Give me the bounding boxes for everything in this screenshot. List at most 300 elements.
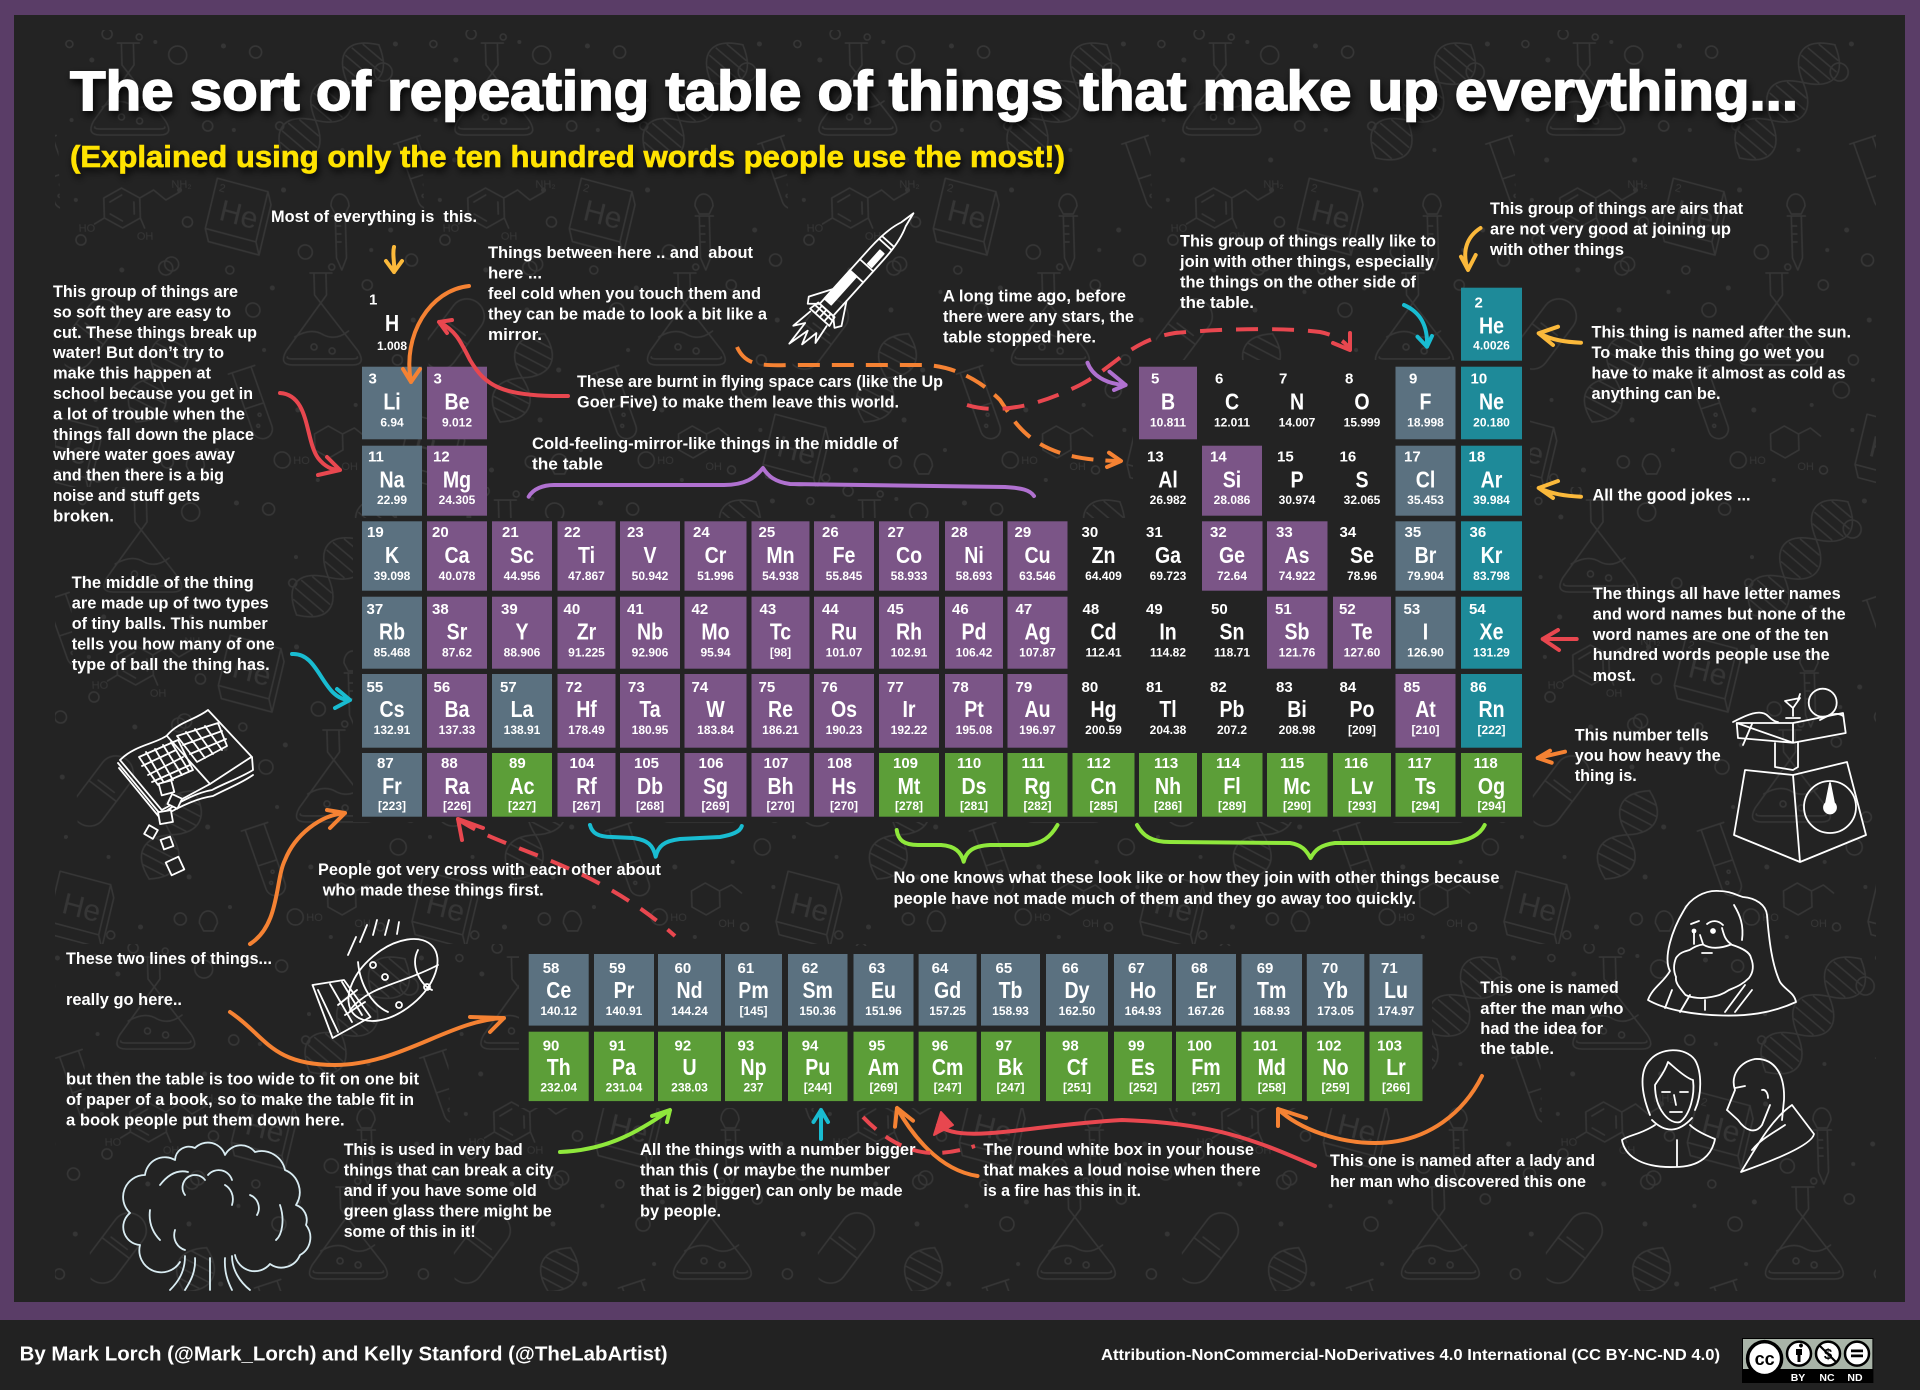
element: Xe: 131.29 <box>1473 646 1510 660</box>
element: Sb: 51 <box>1275 601 1292 618</box>
element: Nd: Nd <box>676 978 703 1003</box>
element: Mn: Mn <box>766 543 795 568</box>
text: mass note: thing is. <box>1575 767 1637 785</box>
element: Sm: 62 <box>802 960 818 977</box>
text: names note: and word names but none of the <box>1593 606 1846 624</box>
element: Pr: Pr <box>614 978 634 1003</box>
element: Ar: Ar <box>1481 467 1502 493</box>
element: Bk <box>981 1032 1040 1101</box>
element: Rf: 104 <box>570 755 595 772</box>
text: uranium note: and if you have some old <box>344 1182 537 1200</box>
element: Lr: 103 <box>1377 1038 1402 1055</box>
text: naming dispute note: People got very cross with each other about <box>318 861 661 879</box>
element: Sn: Sn <box>1220 619 1244 645</box>
icon: scales <box>1733 689 1866 862</box>
element: Th: Th <box>547 1055 571 1081</box>
element: W <box>684 674 746 748</box>
element: K <box>362 521 422 591</box>
element: Nb <box>620 597 680 669</box>
text: synthetic note: by people. <box>640 1202 721 1220</box>
element: V: 50.942 <box>632 569 669 583</box>
element: Po: Po <box>1350 697 1374 722</box>
element: W: W <box>706 697 726 722</box>
element: Tl: 81 <box>1146 679 1163 696</box>
element: Po: 84 <box>1340 679 1357 696</box>
arrow: metals to lithium <box>403 286 469 382</box>
text: names note: word names are one of the ten <box>1592 626 1829 644</box>
element: Ir <box>879 674 939 748</box>
element: Te <box>1333 597 1391 669</box>
element: Yb <box>1307 954 1364 1026</box>
text: uranium note: things that can break a city <box>344 1162 555 1180</box>
element: Cs: 132.91 <box>374 723 411 737</box>
element: Og: Og <box>1478 774 1505 799</box>
element: Sr <box>427 597 487 669</box>
element: Ra: 88 <box>441 755 458 772</box>
element: Rh: 102.91 <box>891 646 928 660</box>
footer: credits: By Mark Lorch (@Mark_Lorch) and Kelly Stanford (@TheLabArtist) <box>20 1343 668 1366</box>
element: Ta: Ta <box>639 697 661 722</box>
element: S: 32.065 <box>1344 493 1381 507</box>
element: Rh <box>879 597 939 669</box>
text: smoke alarm note <box>983 1141 1261 1200</box>
element: I: 126.90 <box>1407 646 1444 660</box>
element: Rb: 85.468 <box>374 646 411 660</box>
element: Ga: 31 <box>1146 524 1163 541</box>
element: Na: 11 <box>368 449 384 466</box>
arrow: rocket fuel to hydrogen <box>439 320 568 396</box>
element: Ir: Ir <box>902 697 916 722</box>
element: Th <box>529 1032 589 1101</box>
text: noble gases note: This group of things are airs that <box>1490 200 1743 218</box>
element: Lr <box>1370 1032 1422 1101</box>
element: Sm <box>788 954 848 1026</box>
element: C: 6 <box>1215 371 1223 388</box>
text: alkali metals note: a lot of trouble when the <box>53 405 245 423</box>
element: Pr: 59 <box>609 960 626 977</box>
text: alkali metals note: where water goes away <box>52 446 236 464</box>
element: Hf: 72 <box>566 679 582 696</box>
element: Sg <box>684 753 746 817</box>
text: mendelevium note: the table. <box>1480 1040 1554 1058</box>
text: helium note: anything can be. <box>1592 385 1720 403</box>
element: Fe: Fe <box>833 543 856 568</box>
element: Sn: 118.71 <box>1214 646 1250 660</box>
element: Gd <box>919 954 977 1026</box>
element: F: 18.998 <box>1407 416 1444 430</box>
element: Er: Er <box>1196 978 1216 1003</box>
text: halogens note: This group of things really like to <box>1180 233 1436 251</box>
element: Eu: Eu <box>871 978 896 1003</box>
element: Al: 13 <box>1147 449 1164 466</box>
element: Mc: Mc <box>1283 774 1311 799</box>
text: big bang note: there were any stars, the <box>943 308 1134 326</box>
element: Ds: 110 <box>957 755 981 772</box>
brace: unknown 2 <box>1137 825 1485 858</box>
element: Pm <box>725 954 782 1026</box>
element: N: 7 <box>1279 371 1287 388</box>
element: H: H <box>385 311 399 336</box>
element: Np: 93 <box>738 1038 754 1055</box>
text: alkali metals note <box>52 283 257 525</box>
text: superheavy note: No one knows what these look like or how they join with other things because <box>894 869 1500 887</box>
element: Kr <box>1461 521 1522 591</box>
arrow: uranium <box>560 1110 670 1152</box>
element: B: 5 <box>1151 371 1159 388</box>
element: Zn: 30 <box>1082 524 1098 541</box>
element: Ca: Ca <box>445 543 470 568</box>
element: Np <box>725 1032 782 1101</box>
element: Pt <box>945 674 1003 748</box>
element: Bi <box>1267 674 1327 748</box>
element: I <box>1396 597 1456 669</box>
text: transition metals note <box>532 435 899 474</box>
arrow: noble gases <box>1461 228 1480 270</box>
text: synthetic note: All the things with a number bigger <box>640 1141 916 1159</box>
element: O <box>1333 367 1391 439</box>
element: Mt: 109 <box>893 755 918 772</box>
element: Cn: 112 <box>1086 755 1111 772</box>
element: Ac: 89 <box>509 755 526 772</box>
element: In: In <box>1159 619 1177 645</box>
icon: Pierre Curie portrait <box>1727 1059 1814 1172</box>
element: Am <box>854 1032 914 1101</box>
element: Mo: Mo <box>701 619 730 645</box>
element: Ne <box>1461 367 1522 439</box>
element: Re: Re <box>768 697 793 722</box>
element: Pb: 207.2 <box>1217 723 1247 737</box>
text: uranium note: This is used in very bad <box>344 1141 523 1159</box>
element: Db: 105 <box>634 755 659 772</box>
element: Pa: 91 <box>609 1038 626 1055</box>
element: Ag: Ag <box>1024 619 1051 645</box>
brace: naming dispute <box>590 825 742 857</box>
element: Zr: Zr <box>577 619 596 645</box>
element: Sb: 121.76 <box>1279 646 1316 660</box>
element: Rn: 86 <box>1470 679 1487 696</box>
element: Er <box>1176 954 1236 1026</box>
element: Tl <box>1139 674 1197 748</box>
element: Ni <box>945 521 1003 591</box>
element: Fl: 114 <box>1216 755 1241 772</box>
element: Ir: 192.22 <box>891 723 928 737</box>
element: Sg: Sg <box>703 774 728 799</box>
element: Kr: Kr <box>1481 543 1502 568</box>
element: Fe <box>814 521 874 591</box>
element: Ta: 73 <box>628 679 645 696</box>
element: Eu <box>854 954 914 1026</box>
text: alkali metals note: school because you get in <box>53 385 253 403</box>
element: Lv <box>1333 753 1391 817</box>
arrow: boron <box>1088 363 1126 390</box>
element: Fe: 26 <box>822 524 839 541</box>
element: Ar <box>1461 446 1522 516</box>
element: No: No <box>1322 1055 1349 1081</box>
element: Ac: [227] <box>508 799 536 813</box>
element: Sb <box>1267 597 1328 669</box>
element: Tm: 168.93 <box>1253 1004 1290 1018</box>
element: Tl: Tl <box>1159 697 1177 722</box>
element: Po: [209] <box>1348 723 1376 737</box>
text: synthetic note: that is 2 bigger) can only be made <box>640 1182 903 1200</box>
element: Lv: 116 <box>1344 755 1368 772</box>
element: Cm: Cm <box>932 1055 963 1081</box>
element: Ru: Ru <box>831 619 857 645</box>
element: Cn <box>1072 753 1134 817</box>
element: Pu: 94 <box>802 1038 819 1055</box>
element: Sc: 44.956 <box>504 569 541 583</box>
element: Pt: 78 <box>952 679 969 696</box>
text: protons note: The middle of the thing <box>72 574 254 592</box>
element: Pd: Pd <box>962 619 986 645</box>
text: big bang note <box>943 288 1134 346</box>
text: smoke alarm note: The round white box in your house <box>983 1141 1254 1159</box>
element: Au: Au <box>1024 697 1051 722</box>
text: noble gases note: with other things <box>1489 241 1624 259</box>
brace: unknown 1 <box>897 825 1058 862</box>
element: Es: 99 <box>1128 1038 1145 1055</box>
text: rocket fuel note: Goer Five) to make them leave this world. <box>577 394 899 412</box>
element: Nd: 60 <box>674 960 691 977</box>
element: Sb: Sb <box>1285 619 1309 645</box>
text: halogens note: join with other things, especially <box>1179 253 1435 271</box>
element: Ce: Ce <box>546 978 571 1003</box>
element: Pb: Pb <box>1220 697 1244 722</box>
text: big bang note: A long time ago, before <box>943 288 1126 306</box>
element: Pd: 46 <box>952 601 969 618</box>
arrow: argon <box>1539 481 1581 498</box>
text: uranium note: some of this in it! <box>344 1223 476 1241</box>
element: Zr: 40 <box>564 601 580 618</box>
element: Os: 190.23 <box>826 723 863 737</box>
text: helium note <box>1592 324 1851 403</box>
element: Cm <box>919 1032 977 1101</box>
element: Nd: 144.24 <box>671 1004 708 1018</box>
element: Cm: 96 <box>932 1038 948 1055</box>
element: Ge <box>1202 521 1262 591</box>
element: Tc: Tc <box>770 619 791 645</box>
element: Ho <box>1114 954 1172 1026</box>
element: Ca: 40.078 <box>439 569 476 583</box>
element: H <box>362 288 422 361</box>
actinides row <box>529 1032 1422 1101</box>
element: Ca: 20 <box>432 524 449 541</box>
element: Fr: [223] <box>378 799 406 813</box>
element: Sc <box>492 521 552 591</box>
text: names note: The things all have letter names <box>1593 585 1841 603</box>
element: Rf: Rf <box>576 774 598 799</box>
element: Ni: Ni <box>964 543 984 568</box>
element: Zn: Zn <box>1092 543 1115 568</box>
element: Cs <box>362 674 422 748</box>
element: Na: Na <box>380 467 405 493</box>
element: O: 15.999 <box>1344 416 1381 430</box>
element: Fl <box>1202 753 1262 817</box>
element: Ne: 20.180 <box>1473 416 1510 430</box>
element: K: 39.098 <box>374 569 411 583</box>
element: Mt <box>879 753 939 817</box>
text: alkali metals note: so soft they are easy to <box>53 303 231 321</box>
element: Fl: Fl <box>1223 774 1241 799</box>
text: curium note <box>1330 1152 1595 1191</box>
element: Po <box>1333 674 1391 748</box>
element: Pt: Pt <box>964 697 984 722</box>
element: Es <box>1114 1032 1172 1101</box>
element: Nb: 92.906 <box>632 646 669 660</box>
element: Br: 35 <box>1404 524 1421 541</box>
element: Rf: [267] <box>572 799 601 813</box>
element: Cu: 63.546 <box>1019 569 1056 583</box>
icon: cc licence badge: $ <box>1824 1346 1833 1363</box>
element: Se: 78.96 <box>1347 569 1377 583</box>
icon: Marie Curie portrait <box>1622 1050 1715 1167</box>
element: Lu <box>1370 954 1422 1026</box>
text: names note: hundred words people use the <box>1593 646 1830 664</box>
element: Ca <box>427 521 487 591</box>
text: metals definition: feel cold when you touch them and <box>488 285 761 303</box>
text: uranium note <box>344 1141 555 1241</box>
element: Be <box>427 367 487 439</box>
element: Bi: 208.98 <box>1279 723 1316 737</box>
element: Ir: 77 <box>887 679 904 696</box>
icon: cc licence badge: cc <box>1755 1349 1775 1369</box>
arrow: atomic number <box>292 654 350 708</box>
element: He: 2 <box>1474 294 1483 311</box>
element: Fr <box>362 753 422 817</box>
element: Hf: 178.49 <box>568 723 605 737</box>
element: Og: 118 <box>1474 755 1498 772</box>
element: Lr: Lr <box>1386 1055 1406 1081</box>
element: Zn: 64.409 <box>1085 569 1122 583</box>
element: Cd: 112.41 <box>1085 646 1122 660</box>
element: I: 53 <box>1404 601 1420 618</box>
element: Au: 79 <box>1016 679 1032 696</box>
element: N: 14.007 <box>1279 416 1316 430</box>
element: La: 57 <box>500 679 517 696</box>
element: Cr: Cr <box>705 543 726 568</box>
element: Tc: 43 <box>760 601 776 618</box>
element: Ta <box>620 674 680 748</box>
element: Tb: Tb <box>999 978 1022 1003</box>
element: Lu: Lu <box>1384 978 1408 1003</box>
element: Zn <box>1072 521 1134 591</box>
element: Fr: 87 <box>377 755 394 772</box>
element: At: 85 <box>1404 679 1420 696</box>
element: Ba: 56 <box>434 679 450 696</box>
element: Rb: Rb <box>379 619 405 645</box>
element: Hf: Hf <box>576 697 598 722</box>
element: Li: Li <box>383 389 401 415</box>
element: At: At <box>1415 697 1436 722</box>
arrow: fluorine <box>1404 305 1432 347</box>
arrow: synthetic <box>814 1110 828 1139</box>
text: curium note: This one is named after a lady and <box>1330 1152 1595 1170</box>
element: Tb: 65 <box>996 960 1012 977</box>
element: Db: [268] <box>636 799 664 813</box>
element: Se: 34 <box>1340 524 1357 541</box>
element: Ho: 67 <box>1128 960 1145 977</box>
element: Db <box>620 753 680 817</box>
element: Te: Te <box>1351 619 1373 645</box>
element: Sg: [269] <box>701 799 730 813</box>
element: Ra <box>427 753 487 817</box>
element: Mg: 24.305 <box>439 493 476 507</box>
element: Lv: Lv <box>1351 774 1374 799</box>
element: Dy <box>1046 954 1108 1026</box>
element: Rn: [222] <box>1477 723 1506 737</box>
element: Nh: 113 <box>1154 755 1178 772</box>
element: Rn <box>1461 674 1522 748</box>
text: naming dispute note <box>318 861 661 900</box>
element: K: 19 <box>367 524 384 541</box>
element: Br: Br <box>1415 543 1436 568</box>
element: Sg: 106 <box>698 755 724 772</box>
element: Hs <box>814 753 874 817</box>
element: In: 49 <box>1146 601 1163 618</box>
arrow: alkali metals <box>280 393 340 475</box>
element: La: La <box>511 697 534 722</box>
text: halogens note: the things on the other side of <box>1180 274 1416 292</box>
element: O: O <box>1354 389 1370 415</box>
element: Ni: 58.693 <box>956 569 993 583</box>
element: Sm: Sm <box>802 978 833 1003</box>
element: Si: 28.086 <box>1214 493 1251 507</box>
text: curium note: her man who discovered this one <box>1330 1173 1586 1191</box>
element: Gd: 64 <box>932 960 949 977</box>
element: Rn: Rn <box>1478 697 1505 722</box>
subtitle: (Explained using only the ten hundred words people use the most!) <box>70 139 1065 174</box>
icon: cc licence badge: ND <box>1847 1372 1863 1384</box>
text: naming dispute note: who made these things first. <box>322 882 544 900</box>
element: Y: 39 <box>501 601 518 618</box>
element: Hg <box>1072 674 1134 748</box>
element: Pm: 61 <box>738 960 754 977</box>
element: U <box>658 1032 721 1101</box>
element: Ru: 101.07 <box>826 646 863 660</box>
text: smoke alarm note: is a fire has this in it. <box>983 1182 1141 1200</box>
element: Ga <box>1139 521 1197 591</box>
element: S: S <box>1355 467 1369 493</box>
element: Hg: 80 <box>1082 679 1098 696</box>
element: Og: [294] <box>1477 799 1506 813</box>
element: Bi: Bi <box>1287 697 1307 722</box>
element: Ts: Ts <box>1415 774 1436 799</box>
arrow: names <box>1543 630 1577 650</box>
footer: licence: Attribution-NonCommercial-NoDerivatives 4.0 International (CC BY-NC-ND 4.0) <box>1101 1347 1720 1364</box>
arrow: two lines up <box>250 810 345 944</box>
element: Fr: Fr <box>382 774 402 799</box>
element: Te: 52 <box>1339 601 1356 618</box>
element: Cf: Cf <box>1067 1055 1088 1081</box>
element: Re: 75 <box>758 679 775 696</box>
element: Ac: Ac <box>510 774 535 799</box>
element: Pd: 106.42 <box>956 646 993 660</box>
text: protons note: tells you how many of one <box>72 636 275 654</box>
element: Md: Md <box>1258 1055 1286 1081</box>
arrowhead: curium <box>934 1112 953 1135</box>
element: Pr <box>594 954 654 1026</box>
element: Cr: 51.996 <box>697 569 734 583</box>
element: Y <box>492 597 552 669</box>
element: W: 183.84 <box>697 723 734 737</box>
element: Hs: Hs <box>832 774 856 799</box>
element: Ti: 22 <box>564 524 581 541</box>
element: Bh: [270] <box>766 799 795 813</box>
element: B <box>1139 367 1197 439</box>
icon: mushroom cloud <box>123 1143 310 1290</box>
element: No: [259] <box>1321 1081 1350 1095</box>
element: As <box>1267 521 1328 591</box>
